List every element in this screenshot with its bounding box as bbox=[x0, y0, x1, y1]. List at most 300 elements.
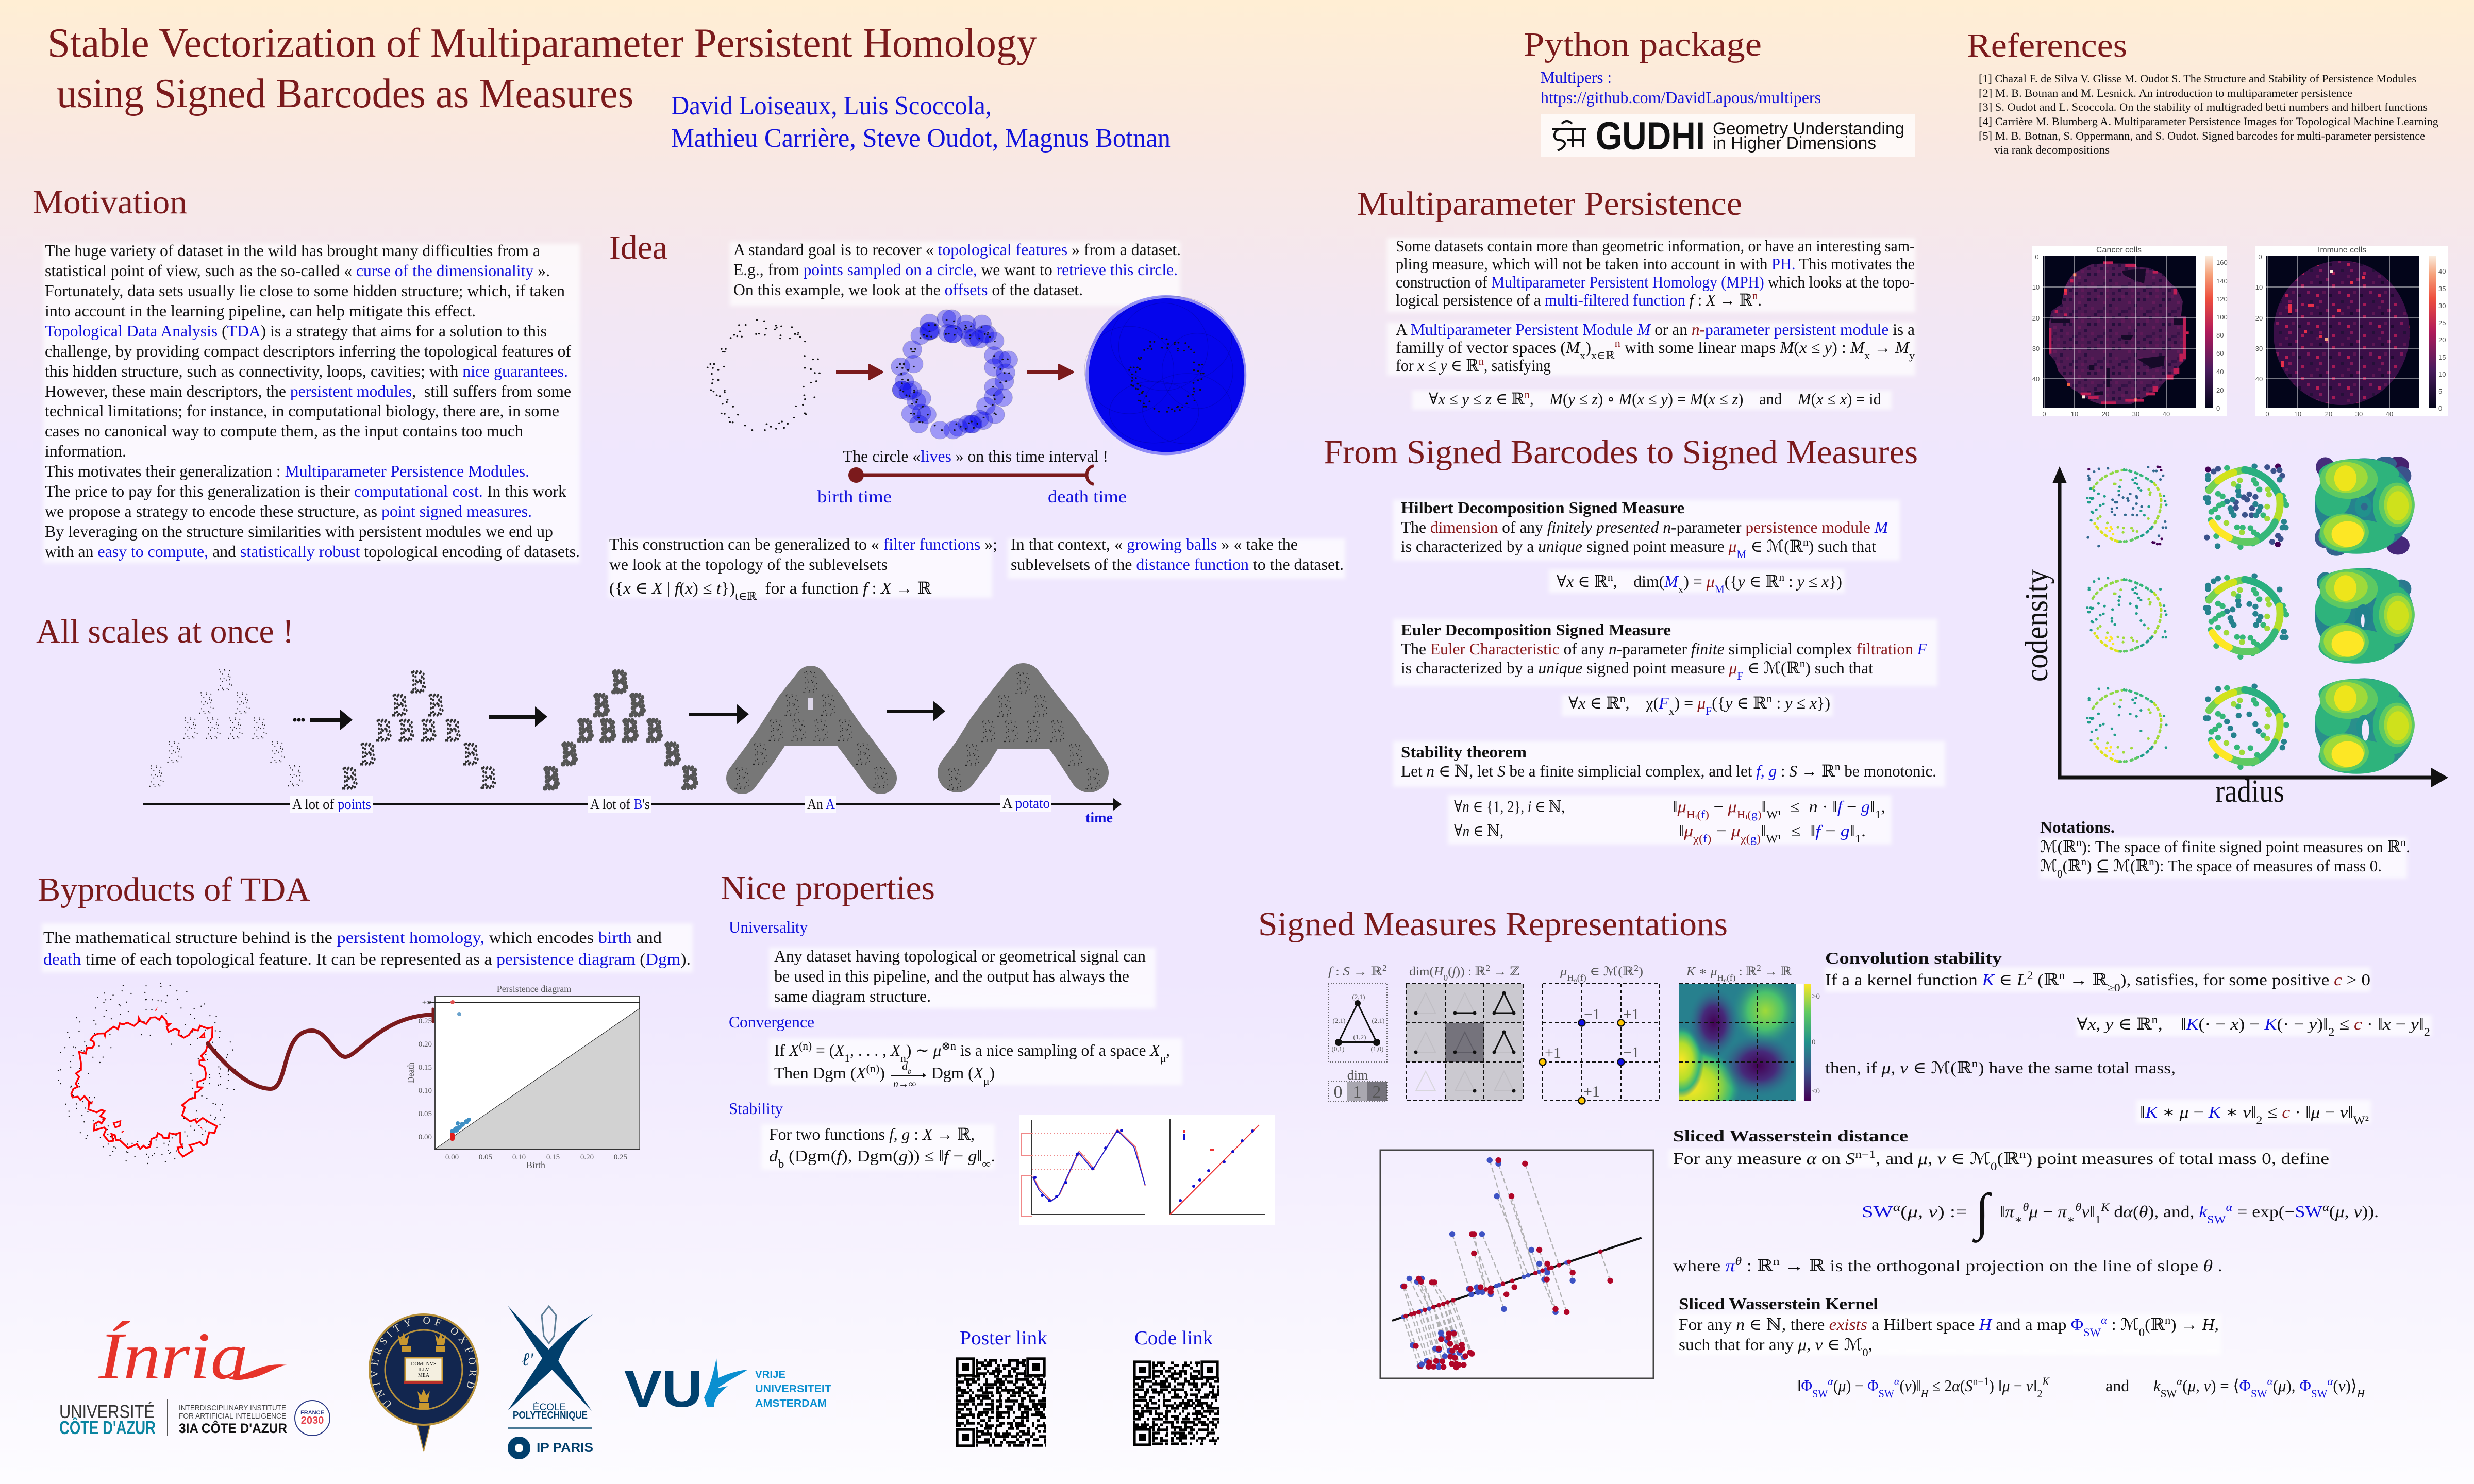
heading: Multiparameter Persistence: Multiparameter Persistence bbox=[1357, 185, 1742, 223]
chart: stage 4, an A shape: B bbox=[821, 688, 836, 722]
chart: convolved heatmap: K ∗ μH₀(f) : ℝ2 → ℝ bbox=[1686, 963, 1792, 982]
caption: circle lifetime: The circle «lives » on this time interval ! bbox=[843, 447, 1108, 465]
chart: stage 2, B letters: B bbox=[481, 761, 496, 795]
equation: stability bounds: ∀n ∈ ℕ, bbox=[1454, 821, 1503, 840]
chart: scatter row 3 column 1 bbox=[2087, 688, 2166, 762]
chart: cancer cells heatmap bbox=[2032, 246, 2228, 418]
text: stability: For two functions f, g : X → ℝ, bbox=[769, 1125, 975, 1143]
text: persistent homology bbox=[42, 923, 693, 972]
chart: immune cells heatmap: 30 bbox=[2438, 302, 2446, 310]
chart: noisy ring with red cycle bbox=[58, 982, 236, 1163]
chart: signed point measure bbox=[1539, 963, 1660, 1104]
logo: University of Oxford: MEA bbox=[418, 1373, 430, 1378]
chart: cancer cells heatmap: 10 bbox=[2071, 410, 2078, 418]
logo: Vrije Universiteit Amsterdam bbox=[624, 1358, 831, 1418]
chart: stage 1, a lot of points: B bbox=[149, 759, 164, 793]
heading: Motivation: Motivation bbox=[32, 183, 187, 221]
arrow: small offsets to large offsets bbox=[1027, 365, 1073, 379]
chart: axes codensity vs radius: codensity bbox=[2019, 569, 2054, 682]
logo: University of Oxford: ILLV bbox=[418, 1367, 430, 1373]
chart: stage 3, thick B letters: B bbox=[647, 713, 662, 747]
chart: cancer cells heatmap: 100 bbox=[2216, 313, 2228, 321]
label: Stability: Stability bbox=[729, 1099, 783, 1118]
chart: cancer cells heatmap: 40 bbox=[2032, 375, 2040, 383]
chart: stage 1, a lot of points: B bbox=[167, 735, 182, 769]
chart: immune cells heatmap: 30 bbox=[2255, 345, 2263, 352]
logo: Université Côte d'Azur bbox=[59, 1399, 330, 1438]
panel: references list: [5] M. B. Botnan, S. Oppermann, and S. Oudot. Signed barcodes for multi-parameter persistence bbox=[1979, 129, 2425, 142]
panel: motivation text: This motivates their generalization : Multiparameter Persistence Modules. bbox=[45, 462, 529, 480]
chart: simplicial complex filtration: (2,1) bbox=[1372, 1017, 1384, 1024]
logo: Université Côte d'Azur: FOR ARTIFICIAL INTELLIGENCE bbox=[179, 1412, 286, 1421]
chart: persistence diagram: 0.20 bbox=[419, 1040, 432, 1049]
chart: convolved heatmap: <0 bbox=[1812, 1087, 1820, 1095]
chart: time axis with labels bbox=[143, 795, 1122, 826]
logo: Université Côte d'Azur: INTERDISCIPLINARY INSTITUTE bbox=[179, 1404, 286, 1412]
chart: stage 1, a lot of points: B bbox=[270, 735, 286, 769]
text: Hilbert decomposition bbox=[1393, 498, 1900, 561]
chart: stage 1, a lot of points: B bbox=[218, 663, 233, 697]
equation: sliced Wasserstein bbox=[1862, 1183, 2379, 1243]
logo: École Polytechnique / IP Paris: ÉCOLE bbox=[533, 1402, 566, 1413]
chart: simplicial complex filtration: f : S → ℝ 2 bbox=[1328, 963, 1387, 979]
panel: motivation text: information. bbox=[45, 442, 126, 460]
panel: motivation text: The price to pay for this generalization is their computational cost. In this work bbox=[45, 482, 566, 500]
panel: references list bbox=[1979, 72, 2438, 156]
panel: motivation text: technical limitations; for instance, in computational biology, there are, in some bbox=[45, 401, 559, 420]
chart: stage 2, B letters: B bbox=[376, 713, 392, 747]
chart: signed point measure: +1 bbox=[1583, 1083, 1600, 1100]
chart: lifetime bar bbox=[848, 466, 1094, 484]
heading: From Signed Barcodes to Signed Measures: From Signed Barcodes to Signed Measures bbox=[1324, 433, 1918, 471]
chart: scatter row 2 column 3 bbox=[2315, 568, 2415, 664]
text: convergence bbox=[769, 1038, 1182, 1090]
chart: immune cells heatmap: 0 bbox=[2265, 410, 2269, 418]
chart: stage 1, a lot of points bbox=[149, 663, 303, 793]
equation: stability bounds: ∀n ∈ {1, 2}, i ∈ ℕ, bbox=[1454, 797, 1565, 816]
text: notations bbox=[2040, 818, 2410, 880]
text: persistent homology: death time of each topological feature. It can be represented as a persistence diagram (Dgm). bbox=[43, 950, 691, 968]
chart: stage 3, thick B letters: B bbox=[594, 688, 609, 722]
text: convergence: Dgm (Xμ) bbox=[931, 1064, 995, 1087]
label: birth time: birth time bbox=[817, 487, 892, 507]
text: notations: ℳ0(ℝn) ⊆ ℳ(ℝn): The space of measures of mass 0. bbox=[2040, 855, 2382, 880]
chart: convolved heatmap bbox=[1639, 963, 1820, 1128]
panel: motivation text: we propose a strategy to encode these structure, as point signed measures. bbox=[45, 502, 532, 520]
chart: persistence diagram: 0.00 bbox=[419, 1133, 432, 1141]
chart: signed point measure: +1 bbox=[1545, 1044, 1561, 1061]
chart: signed point measure: −1 bbox=[1584, 1006, 1600, 1023]
chart: persistence diagram: 0.05 bbox=[419, 1110, 432, 1118]
chart: cancer cells heatmap: 30 bbox=[2132, 410, 2139, 418]
text: filter functions: This construction can be generalized to « filter functions »; bbox=[609, 535, 997, 553]
equation: Euler: ∀x ∈ ℝn, χ(Fx) = μF({y ∈ ℝn : y ≤ x}) bbox=[1568, 693, 1830, 717]
text: convergence: Then Dgm (X(n)) bbox=[774, 1063, 885, 1082]
text: distance function: In that context, « growing balls » « take the bbox=[1011, 535, 1298, 553]
logo: Université Côte d'Azur: 2030 bbox=[301, 1415, 324, 1426]
panel: python package links bbox=[1541, 68, 1821, 107]
arrow: stage 4 to 5 bbox=[887, 701, 945, 721]
panel: motivation text: By leveraging on the structure similarities with persistent modules we end up bbox=[45, 522, 553, 541]
legend: dim: 2 bbox=[1372, 1083, 1381, 1102]
QR code: poster finder patterns bbox=[957, 1359, 1044, 1446]
text: convergence: If X(n) = (X1, . . . , Xn) ∼ μ⊗n is a nice sampling of a space Xμ, bbox=[774, 1040, 1170, 1065]
equation: kernel bound: and bbox=[2105, 1376, 2129, 1395]
legend: dim: 1 bbox=[1352, 1083, 1362, 1102]
chart: immune cells heatmap: 40 bbox=[2386, 410, 2393, 418]
text: Hilbert decomposition: is characterized by a unique signed point measure μM ∈ ℳ(ℝn) such that bbox=[1401, 536, 1876, 561]
chart: stage 5, a potato bbox=[947, 666, 1101, 796]
chart: points sampled on a circle bbox=[707, 320, 820, 430]
panel: idea intro text: A standard goal is to recover « topological features » from a dataset. bbox=[733, 240, 1181, 259]
logo: University of Oxford: DOMI NVS bbox=[411, 1361, 437, 1367]
chart: stage 4, an A shape: B bbox=[784, 688, 800, 722]
chart: time axis with labels: A potato bbox=[1002, 796, 1050, 812]
chart: persistence diagram: Persistence diagram bbox=[497, 984, 571, 994]
chart: stage 2, B letters bbox=[342, 665, 496, 795]
text: orthogonal projection: where πθ : ℝ n → ℝ is the orthogonal projection on the line of slope θ . bbox=[1673, 1255, 2222, 1275]
chart: immune cells heatmap: 35 bbox=[2438, 285, 2446, 293]
text: sliced Wasserstein distance: For any measure α on Sn−1, and μ, ν ∈ ℳ 0(ℝ n) point measures of total mass 0, define bbox=[1673, 1148, 2329, 1173]
chart: dimension grid: dim(H0(f)) : ℝ2 → ℤ bbox=[1409, 963, 1519, 982]
chart: stage 2, B letters: B bbox=[421, 713, 437, 747]
legend: dim bbox=[1328, 1068, 1387, 1102]
chart: stage 2, B letters: B bbox=[399, 713, 414, 747]
text: multiparameter intro: construction of Multiparameter Persistent Homology (MPH) which looks at the topo- bbox=[1396, 273, 1915, 291]
panel: motivation text: challenge, by providing compact descriptors inferring the topological features of bbox=[45, 342, 571, 360]
chart: stage 3, thick B letters: B bbox=[600, 713, 616, 747]
chart: persistence diagram: 0.00 bbox=[445, 1153, 459, 1161]
chart: stage 1, a lot of points: B bbox=[228, 711, 243, 745]
equation: kernel bound: kSWα(μ, ν) = ⟨ΦSWα(μ), ΦSWα(ν)⟩H bbox=[2153, 1375, 2365, 1400]
chart: stage 4, an A shape: B bbox=[813, 713, 829, 747]
text: multiparameter intro bbox=[1387, 237, 1915, 312]
text: universality: be used in this pipeline, and the output has always the bbox=[774, 967, 1129, 985]
chart: stage 1, a lot of points: B bbox=[199, 686, 214, 720]
text: persistent module definition: familly of vector spaces (Mx)x∈ℝn with some linear maps M(x ≤ y) : Mx → My bbox=[1396, 337, 1915, 362]
chart: stage 5, a potato: B bbox=[997, 689, 1012, 723]
equation: kernel bound bbox=[1797, 1375, 2365, 1400]
QR code: code finder patterns bbox=[1134, 1362, 1217, 1445]
panel: references list: [3] S. Oudot and L. Scoccola. On the stability of multigraded betti numbers and hilbert functions bbox=[1979, 100, 2428, 113]
chart: simplicial complex filtration bbox=[1328, 963, 1387, 1062]
chart: immune cells heatmap: 40 bbox=[2438, 267, 2446, 275]
chart: simplicial complex filtration: (1,2) bbox=[1353, 1033, 1366, 1041]
text: Stability theorem: Let n ∈ ℕ, let S be a finite simplicial complex, and let f, g : S → ℝn be monotonic. bbox=[1401, 761, 1936, 780]
text: convolution stability bbox=[1825, 949, 2370, 994]
panel: references list: [2] M. B. Botnan and M. Lesnick. An introduction to multiparameter persistence bbox=[1979, 87, 2352, 99]
heading: Signed Measures Representations: Signed Measures Representations bbox=[1258, 905, 1728, 943]
chart: stability function and diagram bbox=[1019, 1115, 1275, 1225]
label: Convergence: Convergence bbox=[729, 1013, 814, 1031]
panel: idea intro text: E.g., from points sampled on a circle, we want to retrieve this circle. bbox=[733, 260, 1178, 279]
logo: GUDHI: in Higher Dimensions bbox=[1713, 133, 1876, 153]
chart: stage 2, B letters: B bbox=[428, 688, 444, 722]
panel: python package links: https://github.com/DavidLapous/multipers bbox=[1541, 88, 1821, 107]
arrow: points to small offsets bbox=[836, 365, 882, 379]
equation: stability bounds bbox=[1448, 795, 1892, 845]
chart: axes codensity vs radius: radius bbox=[2215, 774, 2284, 809]
text: Euler decomposition: Euler Decomposition Signed Measure bbox=[1401, 620, 1671, 639]
chart: axes codensity vs radius bbox=[2019, 466, 2448, 809]
chart: scatter row 2 column 2 bbox=[2205, 576, 2286, 656]
equation: functoriality: ∀x ≤ y ≤ z ∈ ℝn, M(y ≤ z) ∘ M(x ≤ y) = M(x ≤ z) and M(x ≤ x) = id bbox=[1429, 389, 1881, 408]
text: Euler decomposition: The Euler Characteristic of any n-parameter finite simplicial complex filtration F bbox=[1401, 639, 1927, 658]
text: sliced Wasserstein kernel: For any n ∈ ℕ, there exists a Hilbert space H and a map ΦSWα : ℳ0(ℝn) → H, bbox=[1679, 1314, 2219, 1339]
chart: cancer cells heatmap: 80 bbox=[2216, 331, 2224, 339]
chart: convolved heatmap: >0 bbox=[1812, 992, 1820, 1001]
chart: cancer cells heatmap: Cancer cells bbox=[2096, 246, 2142, 255]
chart: simplicial complex filtration: (1,0) bbox=[1371, 1045, 1383, 1053]
text: sliced Wasserstein kernel bbox=[1675, 1294, 2221, 1359]
text: filter functions: ({x ∈ X | f(x) ≤ t})t∈ℝ for a function f : X → ℝ bbox=[609, 579, 931, 602]
panel: python package links: Multipers : bbox=[1541, 68, 1612, 87]
chart: cancer cells heatmap: 40 bbox=[2216, 368, 2224, 376]
chart: immune cells heatmap: 30 bbox=[2355, 410, 2363, 418]
logo: Inria: Ínria bbox=[98, 1319, 248, 1393]
title: using Signed Barcodes as Measures bbox=[57, 71, 633, 116]
chart: cancer cells heatmap: 30 bbox=[2032, 345, 2040, 352]
chart: persistence diagram: 0.05 bbox=[479, 1153, 492, 1161]
chart: stage 3, thick B letters: B bbox=[665, 737, 680, 771]
text: stability bbox=[761, 1124, 995, 1170]
chart: cancer cells heatmap: 20 bbox=[2102, 410, 2109, 418]
text: convolution stability: If a a kernel function K ∈ L2 (ℝn → ℝ ≥0), satisfies, for some positive c > 0 bbox=[1825, 969, 2370, 994]
text: Euler decomposition bbox=[1393, 619, 1937, 686]
chart: stage 2, B letters: B bbox=[360, 737, 376, 771]
chart: stage 4, an A shape: B bbox=[856, 737, 871, 771]
chart: simplicial complex filtration: (2,1) bbox=[1333, 1017, 1345, 1024]
text: multiparameter intro: logical persistence of a multi-filtered function f : X → ℝn. bbox=[1396, 290, 1762, 309]
equation: kernel bound: ‖ΦSWα(μ) − ΦSWα(ν)‖H ≤ 2α(Sn−1) ‖μ − ν‖2K bbox=[1797, 1375, 2050, 1400]
text: same total mass: then, if μ, ν ∈ ℳ(ℝ n) have the same total mass, bbox=[1825, 1057, 2176, 1077]
equation: stability bounds: ‖μχ(f) − μχ(g)‖W¹ ≤ ‖f − g‖1. bbox=[1679, 821, 1866, 845]
logo: GUDHI: GUDHI bbox=[1596, 114, 1705, 158]
chart: time axis with labels: A lot of B's bbox=[590, 797, 650, 813]
link label: Code link: Code link bbox=[1134, 1327, 1213, 1349]
chart: immune cells heatmap: 10 bbox=[2294, 410, 2301, 418]
chart: stage 3, thick B letters: B bbox=[612, 665, 628, 699]
panel: references list: [1] Chazal F. de Silva V. Glisse M. Oudot S. The Structure and Stability of Persistence Modules bbox=[1979, 72, 2416, 85]
chart: persistence diagram: 0.10 bbox=[512, 1153, 526, 1161]
chart: cancer cells heatmap: 60 bbox=[2216, 349, 2224, 357]
QR code: poster bbox=[956, 1360, 1046, 1445]
text: Hilbert decomposition: The dimension of any finitely presented n-parameter persistence module M bbox=[1401, 518, 1889, 536]
chart: scatter row 1 column 3 bbox=[2315, 457, 2415, 556]
link label: Poster link: Poster link bbox=[960, 1327, 1047, 1349]
text: multiparameter intro: Some datasets contain more than geometric information, or have an interesting sam- bbox=[1396, 237, 1915, 255]
heading: Nice properties: Nice properties bbox=[721, 869, 935, 907]
title: Stable Vectorization of Multiparameter Persistent Homology bbox=[47, 21, 1037, 66]
logo: Vrije Universiteit Amsterdam: AMSTERDAM bbox=[755, 1398, 827, 1409]
chart: stage 5, a potato: B bbox=[965, 738, 980, 772]
equation: convolution bound: ‖K ∗ μ − K ∗ ν‖2 ≤ c · ‖μ − ν‖W² bbox=[2140, 1103, 2369, 1126]
chart: persistence diagram: Death bbox=[406, 1063, 416, 1083]
panel: motivation text: cases no canonical way to compute them, as the input contains too much bbox=[45, 421, 523, 440]
chart: stage 5, a potato: B bbox=[1026, 714, 1041, 748]
chart: stage 5, a potato: B bbox=[1015, 666, 1031, 700]
text: persistent module definition bbox=[1387, 320, 1915, 376]
logo: École Polytechnique / IP Paris: ℓ' bbox=[522, 1349, 534, 1370]
equation: sliced Wasserstein: ∫ bbox=[1972, 1183, 1993, 1243]
equation: Hilbert: ∀x ∈ ℝn, dim(Mx) = μM({y ∈ ℝn : y ≤ x}) bbox=[1557, 571, 1842, 596]
chart: persistence diagram: Birth bbox=[526, 1160, 545, 1170]
chart: stage 4, an A shape: B bbox=[803, 665, 818, 699]
text: distance function: sublevelsets of the distance function to the dataset. bbox=[1011, 555, 1344, 574]
chart: immune cells heatmap: 10 bbox=[2438, 370, 2446, 378]
chart: stage 4, an A shape: B bbox=[768, 713, 784, 747]
chart: stage 5, a potato: B bbox=[1033, 689, 1048, 723]
panel: references list: [4] Carrière M. Blumberg A. Multiparameter Persistence Images for Topological Machine Learning bbox=[1979, 115, 2438, 128]
text: persistent module definition: for x ≤ y ∈ ℝn, satisfying bbox=[1396, 355, 1551, 375]
text: stability: db (Dgm( f), Dgm( g)) ≤ ‖f − g‖∞. bbox=[769, 1146, 995, 1170]
arrow: stage 2 to 3 bbox=[489, 706, 547, 727]
chart: stage 3, thick B letters bbox=[544, 665, 698, 795]
panel: idea intro text bbox=[730, 240, 1181, 306]
panel: motivation text bbox=[43, 241, 580, 563]
chart: stage 1, a lot of points: B bbox=[288, 758, 303, 792]
legend: dim: 0 bbox=[1334, 1083, 1342, 1102]
chart: stage 3, thick B letters: B bbox=[623, 713, 638, 747]
panel: motivation text: Fortunately, data sets usually lie close to some hidden structure; which, if taken bbox=[45, 281, 565, 300]
chart: simplicial complex filtration: (2,1) bbox=[1352, 993, 1365, 1001]
text: sliced Wasserstein kernel: Sliced Wasserstein Kernel bbox=[1679, 1294, 1878, 1313]
title bbox=[47, 21, 1037, 116]
chart: stage 4, an A shape: B bbox=[838, 713, 853, 747]
chart: stage 5, a potato: B bbox=[1068, 738, 1083, 772]
text: sliced Wasserstein kernel: such that for any μ, ν ∈ ℳ0, bbox=[1679, 1335, 1873, 1359]
chart: immune cells heatmap: 5 bbox=[2438, 387, 2442, 395]
chart: immune cells heatmap: 20 bbox=[2438, 336, 2446, 344]
panel: motivation text: statistical point of view, such as the so-called « curse of the dimensionality ». bbox=[45, 261, 550, 280]
text: persistent module definition: A Multiparameter Persistent Module M or an n-parameter persistent module is a bbox=[1396, 320, 1915, 339]
text: universality bbox=[769, 947, 1156, 1008]
logo: Vrije Universiteit Amsterdam: VRIJE bbox=[755, 1369, 785, 1380]
chart: cancer cells heatmap: 120 bbox=[2216, 295, 2228, 303]
logo: Inria bbox=[98, 1319, 292, 1393]
chart: immune cells heatmap: Immune cells bbox=[2318, 246, 2366, 255]
chart: small offset ring bbox=[891, 310, 1018, 439]
chart: persistence diagram: 0.15 bbox=[546, 1153, 560, 1161]
text: Hilbert decomposition: Hilbert Decomposition Signed Measure bbox=[1401, 498, 1684, 517]
text: filter functions bbox=[608, 535, 997, 602]
chart: dimension grid bbox=[1406, 963, 1523, 1101]
text: Euler decomposition: is characterized by a unique signed point measure μF ∈ ℳ(ℝn) such that bbox=[1401, 657, 1873, 682]
chart: stage 4, an A shape bbox=[734, 665, 889, 795]
logo: École Polytechnique / IP Paris: IP PARIS bbox=[537, 1441, 593, 1455]
chart: immune cells heatmap: 15 bbox=[2438, 353, 2446, 361]
authors: David Loiseaux, Luis Scoccola, bbox=[671, 91, 992, 121]
chart: immune cells heatmap bbox=[2255, 246, 2448, 418]
chart: simplicial complex filtration: (0,1) bbox=[1332, 1045, 1344, 1053]
chart: cancer cells heatmap: 10 bbox=[2032, 283, 2040, 291]
chart: stage 1, a lot of points: B bbox=[206, 711, 221, 745]
chart: stage 5, a potato: B bbox=[1050, 714, 1065, 748]
logo: École Polytechnique / IP Paris: POLYTECHNIQUE bbox=[513, 1410, 588, 1421]
logo: University of Oxford bbox=[369, 1313, 479, 1451]
chart: stage 3, thick B letters: B bbox=[630, 688, 645, 722]
chart: persistence diagram: 0.15 bbox=[419, 1064, 432, 1072]
logo: Université Côte d'Azur: UNIVERSITÉ bbox=[59, 1401, 155, 1422]
chart: persistence diagram: 0.20 bbox=[580, 1153, 594, 1161]
text: convolution stability: Convolution stability bbox=[1825, 949, 2002, 967]
text: Stability theorem bbox=[1393, 741, 1945, 787]
chart: convolved heatmap: 0 bbox=[1812, 1038, 1815, 1047]
text: convergence: db bbox=[902, 1059, 912, 1076]
text: universality: same diagram structure. bbox=[774, 987, 931, 1005]
panel: references list: via rank decompositions bbox=[1994, 143, 2110, 156]
chart: time axis with labels: A lot of points bbox=[292, 797, 371, 813]
chart: persistence diagram: 0.10 bbox=[419, 1087, 432, 1095]
text: sliced Wasserstein distance bbox=[1669, 1126, 2329, 1173]
label: death time: death time bbox=[1048, 487, 1127, 507]
chart: persistence diagram: +∞ bbox=[422, 999, 432, 1007]
chart: immune cells heatmap: 0 bbox=[2258, 253, 2262, 261]
chart: immune cells heatmap: 20 bbox=[2325, 410, 2332, 418]
chart: stage 5, a potato: B bbox=[1085, 762, 1101, 796]
chart: stage 5, a potato: B bbox=[981, 714, 996, 748]
authors: Mathieu Carrière, Steve Oudot, Magnus Botnan bbox=[671, 124, 1171, 153]
chart: stage 2, B letters: B bbox=[463, 737, 479, 771]
chart: cancer cells heatmap: 160 bbox=[2216, 259, 2228, 266]
chart: stage 1, a lot of points: B bbox=[235, 686, 250, 720]
chart: immune cells heatmap: 0 bbox=[2438, 404, 2442, 412]
text: multiparameter intro: pling measure, which will not be taken into account in with PH. This motivates the bbox=[1396, 255, 1915, 273]
chart: cancer cells heatmap: 20 bbox=[2032, 314, 2040, 322]
chart: stage 3, thick B letters: B bbox=[544, 761, 559, 795]
text: universality: Any dataset having topological or geometrical signal can bbox=[774, 947, 1146, 965]
chart: scatter row 3 column 2 bbox=[2205, 686, 2286, 767]
chart: scatter row 1 column 2 bbox=[2205, 466, 2286, 547]
chart: cancer cells heatmap: 0 bbox=[2042, 410, 2046, 418]
chart: scatter row 1 column 1 bbox=[2087, 467, 2166, 546]
authors bbox=[671, 91, 1171, 153]
chart: cancer cells heatmap: 0 bbox=[2216, 404, 2220, 412]
chart: stage 2, B letters: B bbox=[342, 761, 358, 795]
equation: sliced Wasserstein: ‖π∗θμ − π∗θν‖1K dα(θ), and, kSWα = exp(− SW α(μ, ν)). bbox=[2000, 1201, 2379, 1226]
panel: idea intro text: On this example, we look at the offsets of the dataset. bbox=[733, 280, 1083, 299]
arrow: stage 1 to 2 bbox=[293, 710, 353, 730]
panel: motivation text: However, these main descriptors, the persistent modules, still suffers from some bbox=[45, 382, 571, 400]
chart: stage 4, an A shape: B bbox=[753, 737, 768, 771]
chart: immune cells heatmap: 40 bbox=[2255, 375, 2263, 383]
arrow: stage 3 to 4 bbox=[689, 704, 749, 724]
chart: stage 2, B letters: B bbox=[445, 713, 461, 747]
chart: persistence diagram bbox=[406, 984, 640, 1170]
chart: stage 1, a lot of points: B bbox=[252, 711, 268, 745]
heading: All scales at once: All scales at once ! bbox=[36, 613, 294, 650]
logo: Université Côte d'Azur: FRANCE bbox=[300, 1410, 324, 1416]
text: notations: Notations. bbox=[2040, 818, 2115, 836]
chart: stage 4, an A shape: B bbox=[734, 761, 750, 795]
chart: stage 4, an A shape: B bbox=[873, 761, 889, 795]
chart: immune cells heatmap: 25 bbox=[2438, 319, 2446, 327]
text: Stability theorem: Stability theorem bbox=[1401, 743, 1527, 761]
equation: kernel Lipschitz: ∀x, y ∈ ℝ n, ‖K(· − x) − K(· − y)‖2 ≤ c · ‖x − y‖2 bbox=[2077, 1014, 2430, 1038]
text: persistent homology: The mathematical structure behind is the persistent homology, which encodes birth and bbox=[43, 928, 662, 947]
chart: large offset blob bbox=[1084, 295, 1246, 455]
chart: sliced Wasserstein projections bbox=[1380, 1150, 1653, 1378]
logo: GUDHI bbox=[1541, 114, 1915, 158]
chart: stage 4, an A shape: B bbox=[791, 713, 807, 747]
heading: Python package: Python package bbox=[1524, 26, 1762, 63]
panel: motivation text: The huge variety of dataset in the wild has brought many difficulties from a bbox=[45, 241, 540, 260]
chart: persistence diagram: 0.25 bbox=[419, 1017, 432, 1025]
chart: scatter row 3 column 3 bbox=[2315, 678, 2415, 774]
text: notations: ℳ(ℝn): The space of finite signed point measures on ℝn. bbox=[2040, 836, 2410, 856]
heading: Idea: Idea bbox=[609, 229, 667, 266]
equation: stability bounds: ‖μHᵢ(f) − μHᵢ(g)‖W¹ ≤ n · ‖f − g‖1, bbox=[1673, 797, 1885, 821]
